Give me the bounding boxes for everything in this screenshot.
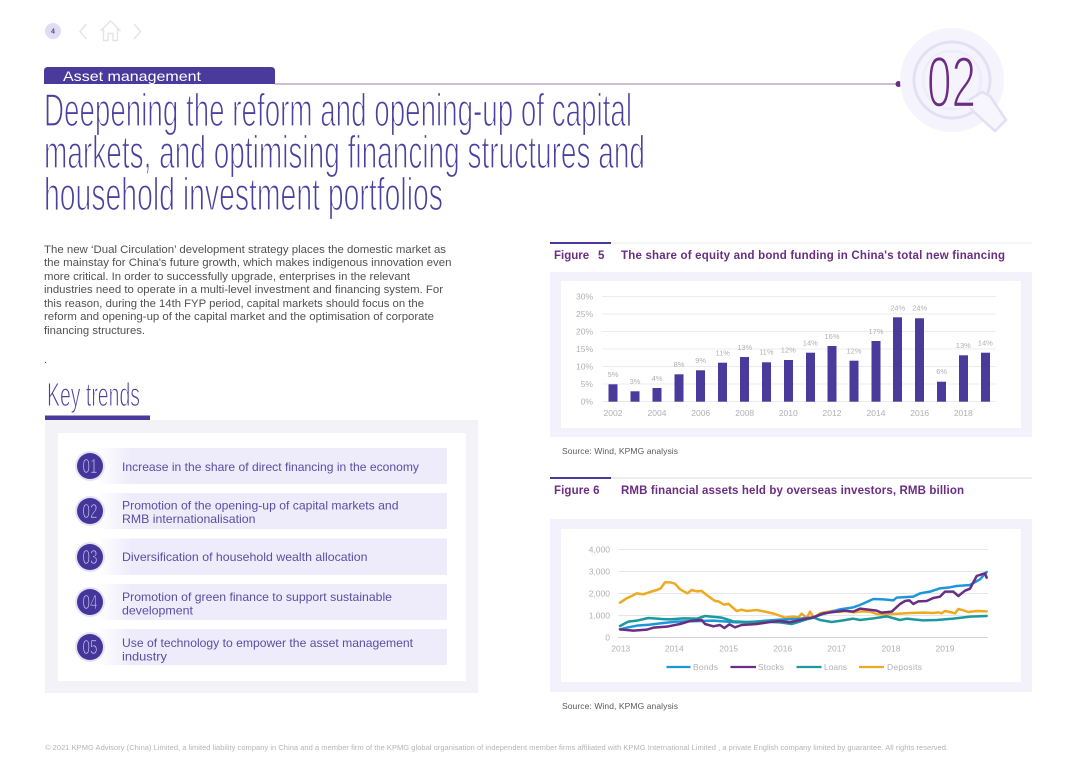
y axis labels: 25% (576, 309, 593, 319)
key trends heading: Key trends (47, 376, 140, 413)
trend 04: development (122, 604, 194, 618)
x axis labels: 2014 (665, 644, 684, 654)
x axis labels: 2008 (735, 408, 754, 418)
bar value labels: 5% (608, 370, 619, 379)
y axis labels: 15% (576, 344, 593, 354)
x axis labels: 2015 (719, 644, 738, 654)
bar value labels: 12% (846, 346, 862, 356)
x axis labels: 2010 (779, 408, 798, 418)
figure 5 heading (550, 242, 1032, 262)
x axis labels: 2006 (691, 408, 710, 418)
figure 6 heading: RMB financial assets held by overseas investors, RMB billion (621, 485, 964, 497)
footer copyright: © 2021 KPMG Advisory (China) Limited, a limited liability company in China and a member firm of the KPMG global organisation of independent member firms affiliated with KPMG International Limited , a private English company limited by guarantee. All rights reserved. (45, 743, 948, 752)
page number badge: 4 (51, 28, 55, 36)
intro paragraph: the mainstay for China's future growth, which makes indigenous innovation even (44, 257, 451, 269)
legend: Deposits (887, 662, 922, 672)
trend 03: 03 (82, 547, 98, 569)
y axis labels: 0% (581, 396, 593, 406)
trend 04: 04 (82, 592, 98, 614)
trend 01: 01 (82, 456, 98, 478)
bar value labels: 8% (674, 360, 685, 369)
series: bonds (620, 572, 987, 629)
series: deposits (620, 582, 987, 618)
section tab (44, 67, 275, 84)
bar value labels: 13% (737, 343, 753, 352)
trend 03: Diversification of household wealth allocation (122, 551, 368, 564)
title: Deepening the reform and opening-up of capital (44, 84, 632, 136)
x axis labels: 2004 (648, 408, 667, 418)
trend 05 (75, 629, 447, 665)
y axis labels (576, 292, 593, 406)
trend 05: industry (122, 650, 167, 664)
bar value labels: 14% (803, 338, 818, 348)
intro paragraph: financing structures. (44, 325, 145, 337)
figure 5 heading: Figure (554, 250, 589, 262)
title (44, 84, 645, 220)
x axis labels: 2002 (604, 408, 623, 418)
bars (608, 317, 990, 402)
bar value labels: 13% (956, 341, 971, 350)
x axis labels: 2013 (611, 644, 630, 654)
y axis labels: 30% (576, 292, 593, 302)
intro paragraph: . (44, 354, 47, 366)
trend 04 (75, 584, 447, 620)
bar value labels: 9% (695, 356, 706, 365)
x axis labels (611, 644, 955, 654)
x axis labels (604, 408, 973, 418)
x axis labels: 2014 (867, 408, 886, 418)
trend 05: Use of technology to empower the asset management (122, 637, 414, 650)
bar value labels: 16% (824, 332, 840, 341)
trend 02: Promotion of the opening-up of capital markets and (122, 500, 398, 512)
figure 6 source: Source: Wind, KPMG analysis (562, 701, 678, 711)
panel: figure 5 bar chart (550, 272, 1032, 437)
figure 6 heading (550, 477, 1032, 497)
figure 5 source: Source: Wind, KPMG analysis (562, 446, 678, 456)
series: stocks (620, 573, 987, 631)
panel: key trends (45, 420, 478, 693)
trend 04: Promotion of green finance to support sustainable (122, 591, 392, 604)
y axis labels: 1,000 (589, 610, 610, 620)
section number emblem: magnifier with 02: 02 (927, 43, 976, 123)
x axis labels: 2018 (882, 644, 901, 654)
page number badge (45, 23, 61, 39)
y axis labels: 2,000 (589, 588, 610, 598)
y axis labels: 4,000 (589, 544, 610, 554)
legend (666, 662, 922, 672)
figure 5 heading: The share of equity and bond funding in China's total new financing (621, 250, 1005, 262)
y axis labels: 3,000 (589, 566, 610, 576)
intro paragraph (44, 244, 451, 366)
title: markets, and optimising financing structures and (44, 126, 645, 178)
section tab: Asset management (63, 68, 201, 84)
trend 02 (75, 493, 447, 529)
trend 05: 05 (82, 637, 98, 659)
legend: Bonds (693, 662, 718, 672)
gridlines (618, 550, 988, 638)
bar value labels: 11% (715, 348, 730, 358)
y axis labels: 10% (576, 362, 593, 372)
y axis labels: 20% (576, 326, 593, 336)
bar value labels: 6% (936, 367, 947, 376)
intro paragraph: industries need to operate in a multi-level investment and financing system. For (44, 284, 443, 296)
intro paragraph: more critical. In order to successfully upgrade, enterprises in the relevant (44, 271, 410, 283)
bar value labels: 17% (868, 327, 884, 336)
x axis labels: 2017 (827, 644, 846, 654)
bar value labels: 3% (630, 377, 641, 386)
x axis labels: 2019 (936, 644, 955, 654)
gridlines (602, 296, 996, 402)
bar value labels: 24% (912, 304, 928, 312)
legend: Loans (824, 662, 847, 672)
bar value labels: 14% (978, 338, 993, 348)
intro paragraph: this reason, during the 14th FYP period, capital markets should focus on the (44, 298, 424, 310)
line series (620, 572, 987, 631)
y axis labels: 0 (605, 632, 610, 642)
y axis labels: 5% (581, 379, 593, 389)
panel: figure 6 line chart (550, 519, 1032, 692)
bar value labels: 24% (890, 304, 906, 312)
header rule with end dot (275, 81, 902, 87)
bar value labels: 4% (652, 374, 663, 383)
legend: Stocks (758, 662, 784, 672)
figure 6 heading: Figure 6 (554, 485, 600, 497)
x axis labels: 2016 (910, 408, 929, 418)
bar value labels (608, 304, 993, 386)
key trends heading (45, 376, 150, 420)
x axis labels: 2018 (954, 408, 973, 418)
trend 01: Increase in the share of direct financing in the economy (122, 461, 419, 474)
trend 02: RMB internationalisation (122, 513, 256, 526)
intro paragraph: The new ‘Dual Circulation’ development strategy places the domestic market as (44, 244, 447, 256)
trend 03 (75, 538, 447, 575)
bar value labels: 11% (759, 348, 774, 356)
trend 02: 02 (82, 501, 98, 523)
trend 01 (75, 448, 447, 484)
intro paragraph: reform and opening-up of the capital market and the optimisation of corporate (44, 311, 434, 323)
figure 5 heading: 5 (598, 250, 605, 262)
y axis labels (589, 544, 610, 642)
series: loans (620, 616, 987, 626)
section number emblem: magnifier with 02 (900, 28, 1006, 132)
navigation icons: back, home, forward (80, 21, 140, 40)
bar value labels: 12% (781, 346, 796, 354)
x axis labels: 2012 (823, 408, 842, 418)
x axis labels: 2016 (773, 644, 792, 654)
title: household investment portfolios (44, 168, 443, 220)
